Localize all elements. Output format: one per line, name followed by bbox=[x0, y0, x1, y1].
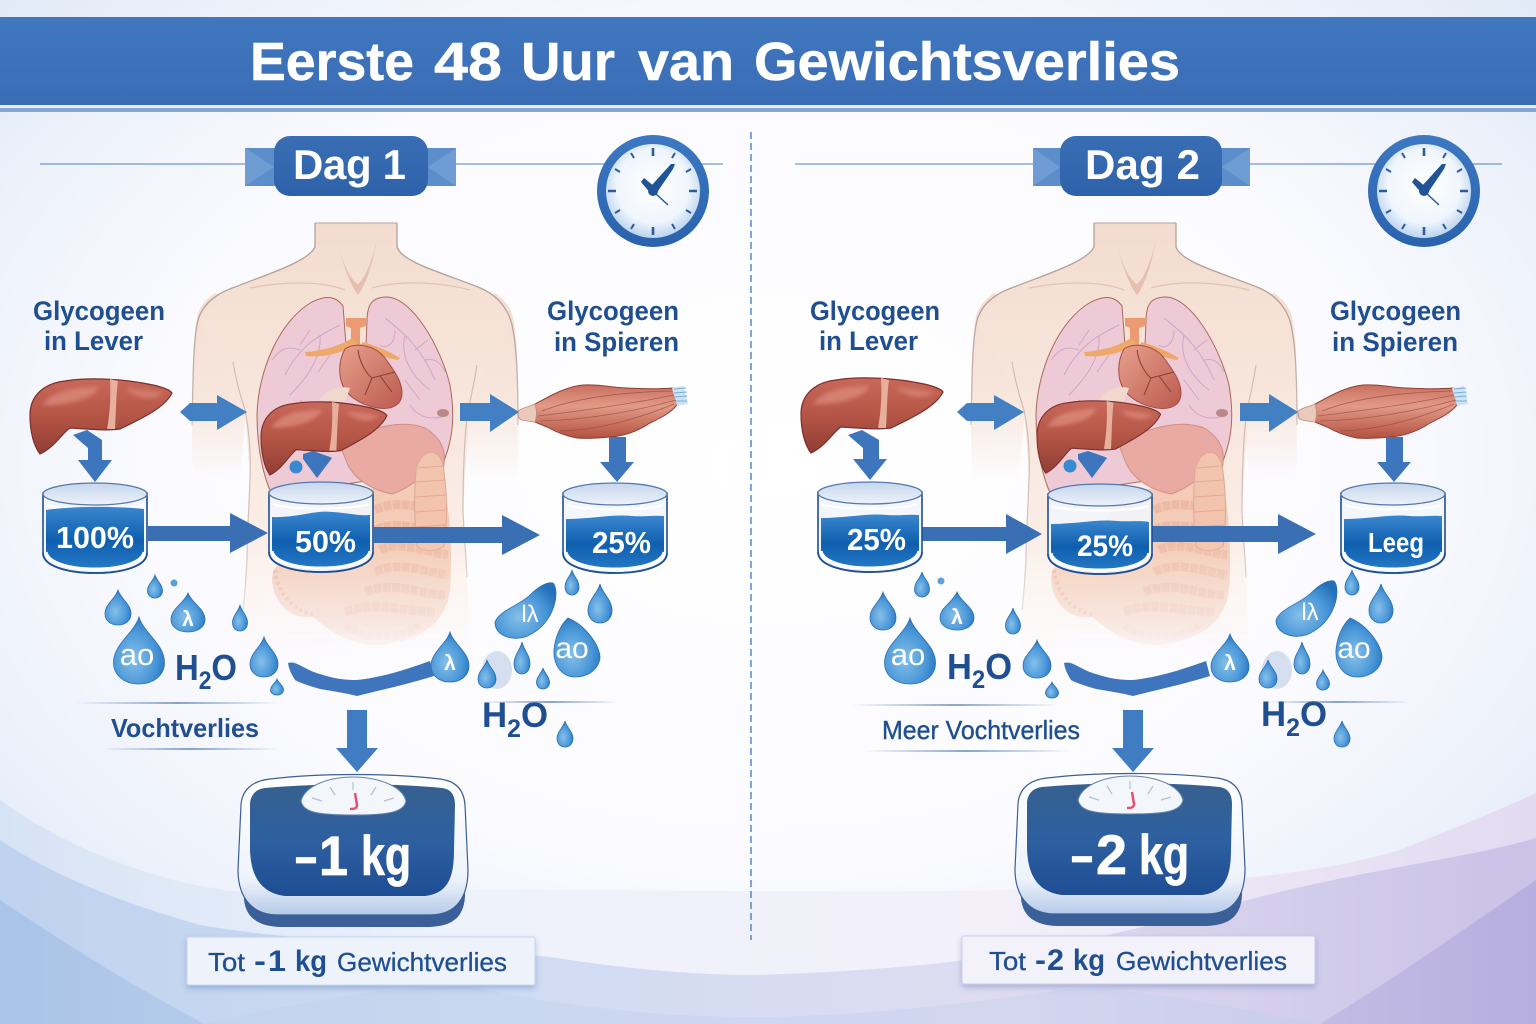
callout: tot -1 kg: - bbox=[254, 945, 266, 978]
icon: muscle bbox=[518, 385, 688, 438]
water drops left: λ bbox=[182, 608, 194, 631]
arrow: down to scale bbox=[1112, 710, 1154, 772]
heading: dag 2 bbox=[795, 136, 1502, 196]
title bbox=[250, 32, 1180, 92]
water drops right: lλ bbox=[521, 601, 539, 628]
arrow: body to muscle bbox=[460, 394, 519, 432]
scale: -1 kg: 1 bbox=[319, 824, 348, 887]
water drops right bbox=[1211, 570, 1393, 747]
arrow: muscle to beaker bbox=[1377, 437, 1411, 482]
heading: glycogeen in spieren: in Spieren bbox=[554, 327, 679, 357]
callout: tot -2 kg bbox=[962, 936, 1315, 984]
water drops left: ao bbox=[891, 637, 925, 672]
arrow: beaker 25 to leeg bbox=[1152, 514, 1316, 554]
label: H2O right: 2 bbox=[507, 715, 521, 743]
title banner bbox=[0, 17, 1536, 112]
arrow: liver to beaker bbox=[73, 430, 112, 482]
beaker: leeg: Leeg bbox=[1368, 527, 1424, 558]
panel: dag 2 bbox=[795, 135, 1502, 984]
label: H2O left: H bbox=[175, 647, 201, 688]
heading: glycogeen in lever bbox=[33, 296, 165, 356]
arrow: muscle to beaker bbox=[600, 437, 634, 482]
icon: liver bbox=[30, 379, 172, 454]
heading: glycogeen in spieren: in Spieren bbox=[1332, 327, 1458, 357]
scale: -1 kg bbox=[238, 774, 468, 927]
beaker: 25%: 25% bbox=[847, 522, 906, 557]
icon: liver in body bbox=[261, 402, 387, 475]
scale: -2 kg: – bbox=[1071, 823, 1093, 886]
callout: tot -1 kg: Gewichtverlies bbox=[337, 947, 507, 977]
title: Eerste bbox=[250, 32, 414, 92]
label: H2O left: H bbox=[947, 646, 973, 687]
label: meer vochtverlies: Meer Vochtverlies bbox=[882, 715, 1080, 745]
callout: tot -2 kg: Gewichtverlies bbox=[1116, 946, 1287, 976]
label: H2O right: O bbox=[521, 696, 548, 735]
water drops left: ao bbox=[120, 637, 154, 672]
icon: gallbladder drop bbox=[1064, 460, 1076, 472]
torso with organs bbox=[192, 223, 518, 660]
label: H2O right: H bbox=[1261, 695, 1286, 734]
title: Gewichtsverlies bbox=[754, 32, 1180, 92]
beaker: 25%: 25% bbox=[592, 525, 651, 560]
callout: tot -2 kg: kg bbox=[1073, 944, 1105, 977]
heading: glycogeen in lever: in Lever bbox=[819, 326, 918, 356]
beaker: 25% body bbox=[1048, 484, 1152, 574]
water drops right: λ bbox=[1224, 652, 1236, 675]
torso with organs bbox=[971, 223, 1297, 660]
label: H2O right: H bbox=[482, 696, 507, 735]
title: 48 bbox=[434, 32, 502, 92]
label: H2O right: 2 bbox=[1286, 714, 1300, 742]
water drops right: ao bbox=[1337, 632, 1371, 665]
beaker: 25% bbox=[563, 483, 667, 573]
beaker: 100%: 100% bbox=[56, 520, 134, 555]
water drops left bbox=[870, 572, 1058, 698]
heading: glycogeen in spieren bbox=[547, 296, 679, 357]
label: H2O left: O bbox=[211, 647, 237, 688]
arrow: beaker 25 to 25 bbox=[922, 514, 1042, 554]
arrow: down to scale bbox=[336, 710, 378, 772]
icon: liver in body bbox=[1037, 401, 1161, 473]
callout: tot -1 kg bbox=[187, 937, 535, 985]
callout: tot -1 kg: Tot bbox=[208, 947, 246, 977]
arrow: body to muscle bbox=[1240, 394, 1298, 432]
label: H2O right: O bbox=[1300, 695, 1327, 734]
panel: dag 1 bbox=[30, 135, 723, 985]
scale: -1 kg: kg bbox=[361, 824, 411, 887]
heading: dag 1 bbox=[40, 136, 723, 196]
water drops right bbox=[431, 570, 612, 747]
title: Uur bbox=[521, 32, 615, 92]
water drops left: λ bbox=[951, 606, 963, 629]
label: vochtverlies: Vochtverlies bbox=[111, 713, 259, 743]
beaker: 50% bbox=[269, 482, 373, 572]
callout: tot -2 kg: - bbox=[1035, 944, 1046, 977]
arrow: liver to body bbox=[957, 395, 1024, 430]
heading: glycogeen in spieren: Glycogeen bbox=[1330, 296, 1461, 326]
arrow: liver to body bbox=[180, 395, 247, 430]
heading: glycogeen in lever: Glycogeen bbox=[33, 296, 165, 326]
beaker: 25% body: 25% bbox=[1077, 530, 1133, 563]
icon: muscle bbox=[1298, 385, 1468, 438]
water drops right: ao bbox=[555, 632, 589, 665]
icon: clock bbox=[597, 135, 709, 247]
heading: glycogeen in lever: Glycogeen bbox=[810, 296, 940, 326]
label: H2O left: 2 bbox=[972, 666, 985, 694]
arrow: body liver to beaker bbox=[303, 451, 332, 478]
water drops left bbox=[105, 575, 284, 695]
icon: clock bbox=[1368, 135, 1480, 247]
beaker: leeg bbox=[1341, 483, 1445, 573]
callout: tot -2 kg: Tot bbox=[989, 946, 1027, 976]
arrow: body liver to beaker bbox=[1078, 451, 1107, 478]
water drops right: λ bbox=[444, 652, 456, 675]
funnel arrow band bbox=[288, 661, 434, 696]
scale: -2 kg bbox=[1015, 774, 1245, 926]
arrow: beaker 50 to 25 bbox=[374, 515, 540, 555]
heading: glycogeen in spieren: Glycogeen bbox=[547, 296, 679, 326]
heading: glycogeen in spieren bbox=[1330, 296, 1461, 357]
label: H2O left: 2 bbox=[199, 667, 211, 695]
heading: dag 2: Dag 2 bbox=[1085, 141, 1200, 188]
funnel arrow band bbox=[1064, 661, 1210, 696]
heading: glycogeen in lever bbox=[810, 296, 940, 356]
vertical divider bbox=[750, 132, 752, 940]
title: van bbox=[638, 32, 734, 92]
icon: gallbladder drop bbox=[290, 460, 302, 474]
beaker: 25% bbox=[818, 482, 922, 572]
water drops right: lλ bbox=[1301, 599, 1319, 626]
icon: liver bbox=[801, 378, 943, 453]
arrow: liver to beaker bbox=[848, 430, 887, 480]
scale: -2 kg: kg bbox=[1139, 823, 1189, 886]
beaker: 50%: 50% bbox=[295, 524, 356, 559]
callout: tot -2 kg: 2 bbox=[1047, 944, 1064, 977]
beaker: 100% bbox=[43, 483, 147, 573]
heading: dag 1: Dag 1 bbox=[293, 141, 406, 188]
label: H2O left: O bbox=[985, 646, 1012, 687]
arrow: beaker 100 to 50 bbox=[148, 513, 268, 553]
scale: -2 kg: 2 bbox=[1096, 823, 1127, 886]
scale: -1 kg: – bbox=[295, 824, 317, 887]
callout: tot -1 kg: kg bbox=[295, 945, 327, 978]
heading: glycogeen in lever: in Lever bbox=[44, 326, 143, 356]
callout: tot -1 kg: 1 bbox=[268, 945, 286, 978]
